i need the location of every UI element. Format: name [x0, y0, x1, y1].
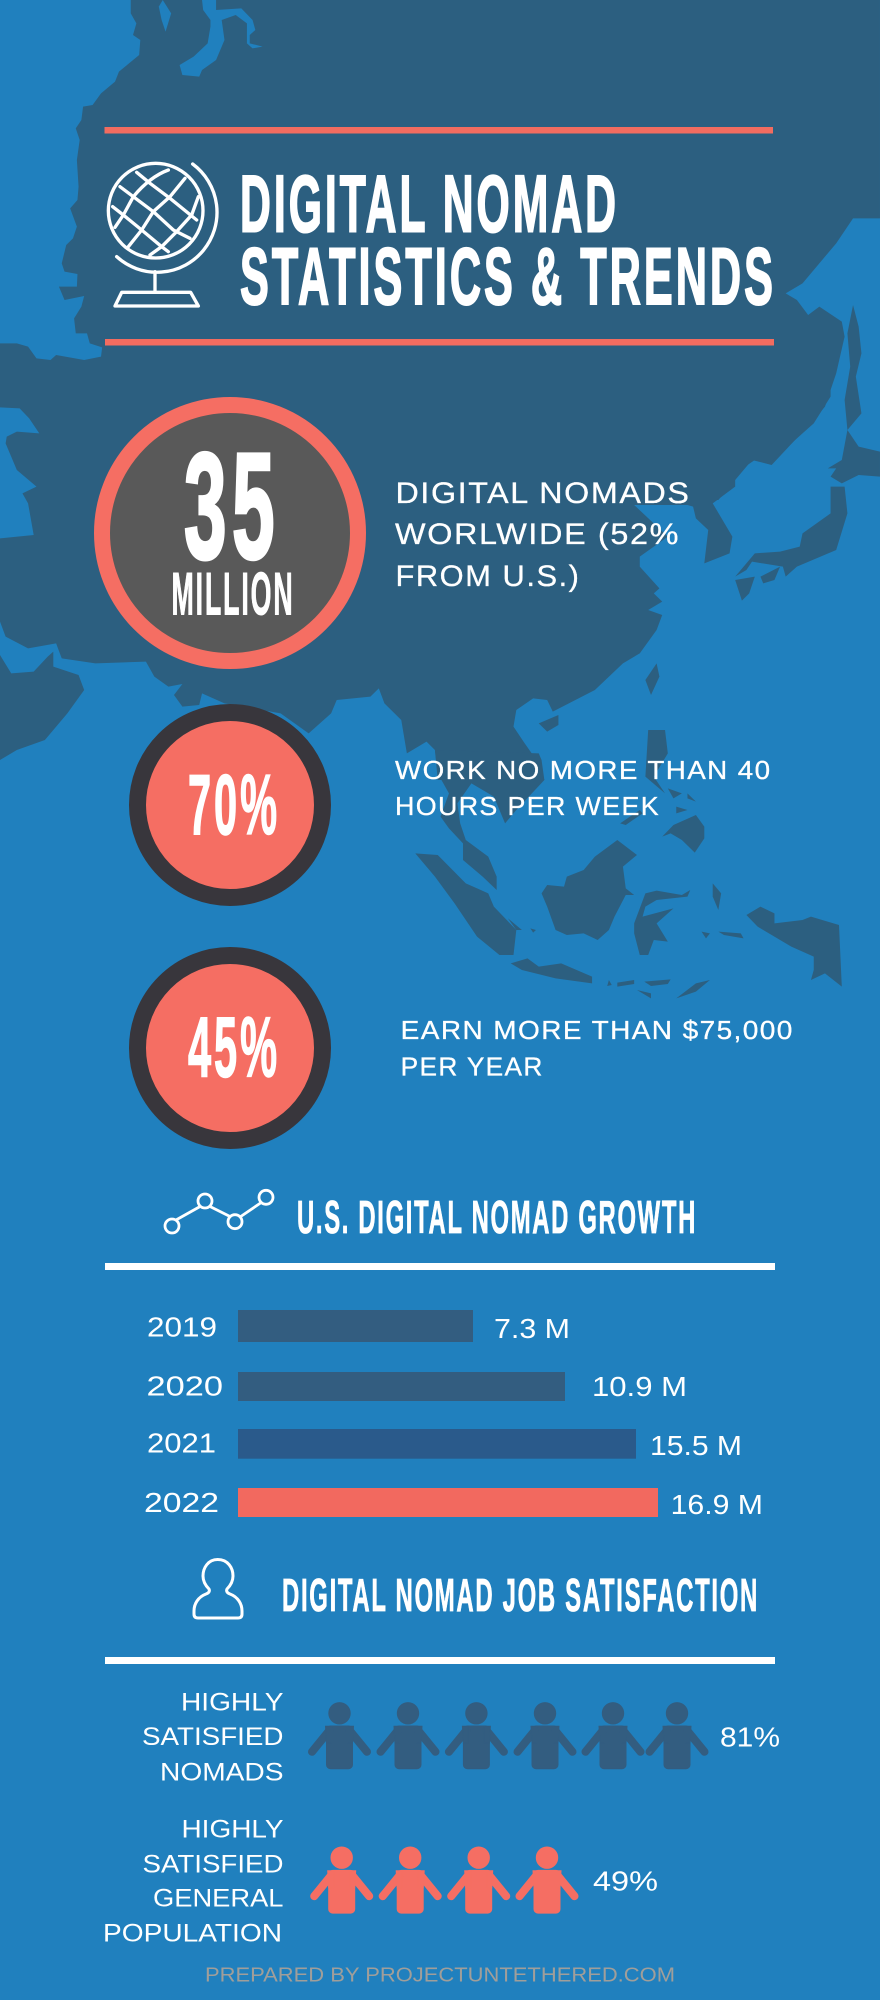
- icon: globe: [108, 163, 217, 306]
- stat: 35 million: [102, 405, 690, 661]
- stat text: 45%: PER YEAR: [401, 1052, 544, 1082]
- stat text: 70%: WORK NO MORE THAN 40: [395, 755, 772, 785]
- pictogram: six people: [312, 1703, 704, 1769]
- icon: person outline: [194, 1560, 242, 1618]
- satisfaction section heading: [105, 1560, 775, 1664]
- bar chart: U.S. digital nomad growth: 15.5 M: [650, 1430, 742, 1461]
- stat: 45%: [138, 956, 794, 1140]
- row: highly satisfied general population: HIGHLY: [182, 1816, 284, 1844]
- stat: 45%: 45%: [188, 1000, 280, 1096]
- row: highly satisfied nomads: 81%: [720, 1722, 780, 1753]
- bar chart: U.S. digital nomad growth: 2020: [146, 1371, 223, 1402]
- stat text: 35 million: WORLWIDE (52%: [395, 518, 680, 551]
- bar chart: U.S. digital nomad growth: 2021: [147, 1428, 216, 1459]
- row: highly satisfied nomads: NOMADS: [160, 1759, 284, 1787]
- bar chart: U.S. digital nomad growth: 2019: [147, 1312, 217, 1343]
- row: highly satisfied nomads: SATISFIED: [142, 1723, 284, 1751]
- row: highly satisfied general population: 49%: [593, 1866, 658, 1897]
- pictogram: four people: [314, 1847, 574, 1913]
- stat text: 70%: [395, 755, 772, 821]
- bar chart: U.S. digital nomad growth: 10.9 M: [592, 1371, 687, 1402]
- header block: [104, 127, 776, 346]
- stat text: 45%: EARN MORE THAN $75,000: [401, 1015, 794, 1045]
- row: highly satisfied nomads: HIGHLY: [181, 1689, 284, 1717]
- row: highly satisfied general population: [103, 1816, 658, 1948]
- bar chart: U.S. digital nomad growth: [144, 1310, 763, 1520]
- stat text: 70%: HOURS PER WEEK: [395, 791, 660, 821]
- row: highly satisfied general population: SATISFIED: [142, 1851, 284, 1879]
- icon: line chart: [165, 1190, 273, 1233]
- stat text: 45%: [401, 1015, 794, 1082]
- stat text: 35 million: DIGITAL NOMADS: [396, 477, 690, 510]
- row: highly satisfied general population: POPULATION: [103, 1920, 282, 1948]
- stat text: 35 million: FROM U.S.): [396, 560, 580, 593]
- bar chart: U.S. digital nomad growth: 7.3 M: [494, 1313, 570, 1344]
- bar chart: U.S. digital nomad growth: 16.9 M: [671, 1489, 763, 1520]
- row: highly satisfied nomads: [142, 1689, 780, 1787]
- stat: 35 million: MILLION: [172, 560, 294, 628]
- stat: 35 million: 35: [184, 421, 280, 590]
- bar chart: U.S. digital nomad growth: 2022: [144, 1487, 219, 1518]
- stat: 70%: 70%: [188, 758, 280, 853]
- world map background: [0, 0, 880, 998]
- stat text: 35 million: [395, 477, 690, 593]
- row: highly satisfied general population: GENERAL: [153, 1885, 284, 1913]
- stat: 70%: [138, 712, 772, 898]
- title: [240, 160, 776, 322]
- footer credit: PREPARED BY PROJECTUNTETHERED.COM: [205, 1965, 675, 1987]
- growth section heading: [105, 1190, 775, 1270]
